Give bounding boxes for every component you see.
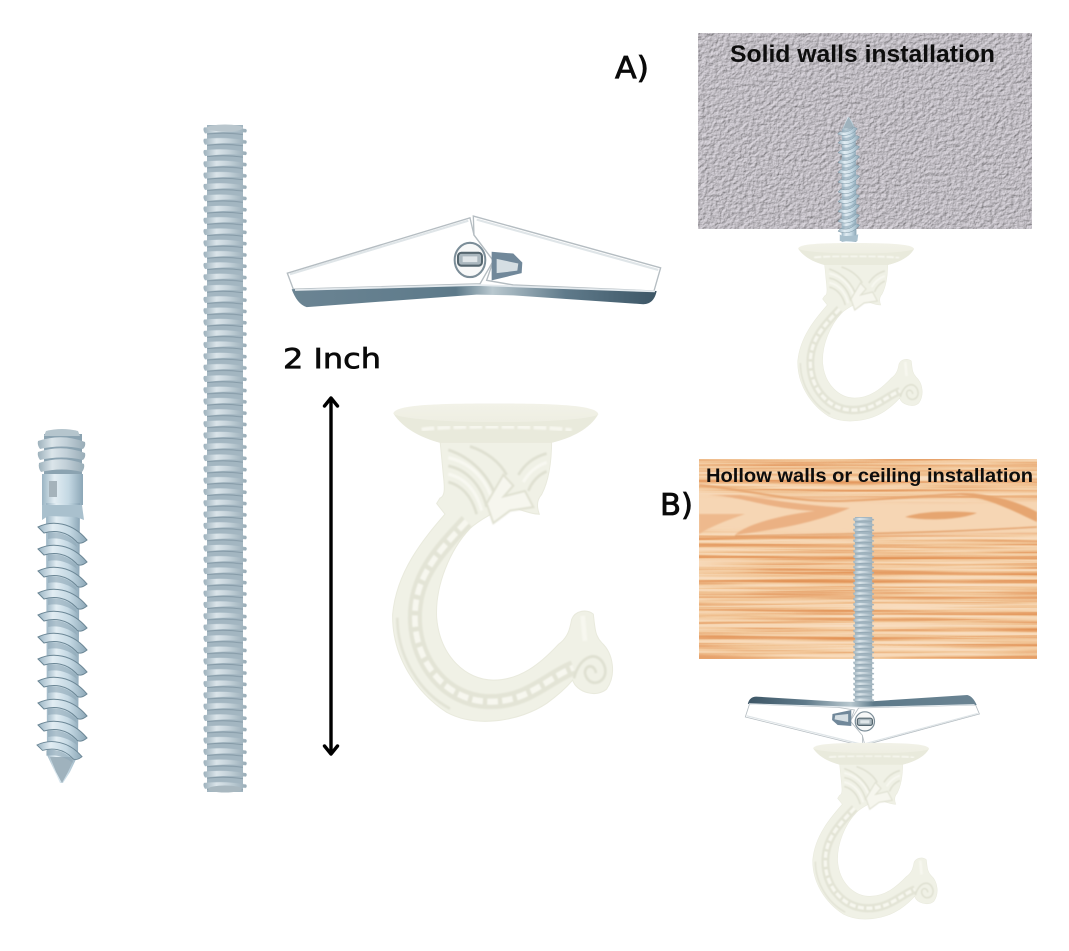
- wall texture: [698, 33, 1032, 229]
- wood texture: [699, 459, 1037, 659]
- panel: hollow walls or ceiling installation: [699, 459, 1037, 920]
- screw in wall: [838, 117, 860, 242]
- large ceiling hook: [393, 403, 613, 721]
- toggle wing anchor: [287, 216, 661, 307]
- label: 2 Inch: 2 Inch: [283, 342, 381, 375]
- label: A): A): [615, 51, 649, 86]
- threaded rod through wood: [853, 517, 874, 705]
- label: B): B): [660, 488, 693, 523]
- small hook: [813, 743, 937, 919]
- arrow: 2 inch dimension: [324, 398, 338, 754]
- small hook: [798, 243, 922, 421]
- heading: solid walls: Solid walls installation: [730, 41, 995, 68]
- wood cathedral grain: [680, 485, 1060, 536]
- threaded rod: [203, 124, 247, 792]
- small toggle anchor: [745, 695, 979, 746]
- heading: hollow walls: Hollow walls or ceiling installation: [706, 465, 1033, 487]
- panel: solid walls installation: [698, 33, 1032, 421]
- lag screw with coarse thread: [37, 429, 87, 783]
